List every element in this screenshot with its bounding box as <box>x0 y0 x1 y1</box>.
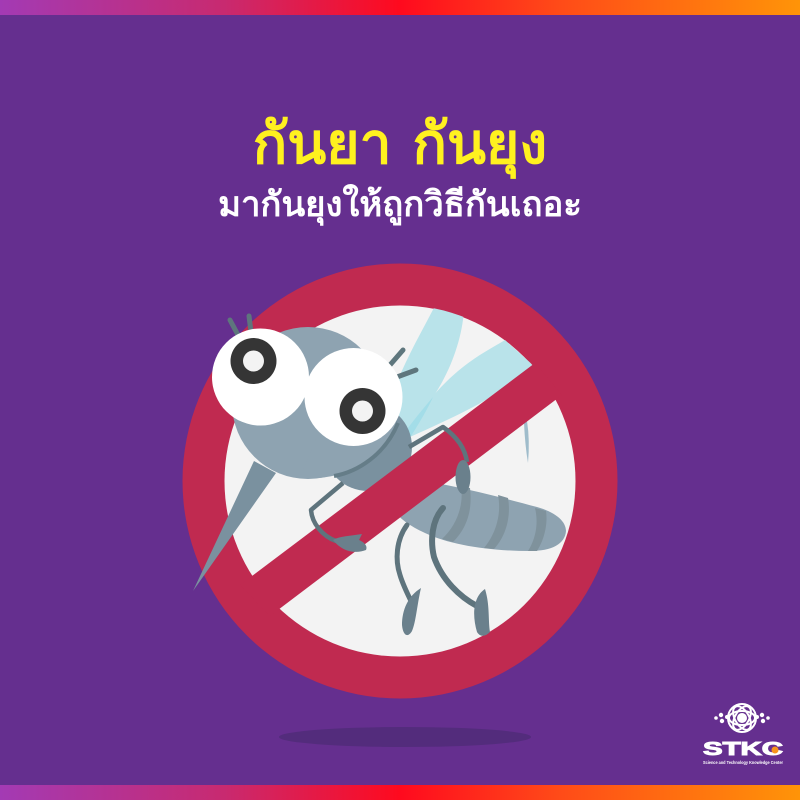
top gradient band <box>0 0 800 15</box>
mosquito wings <box>399 308 532 437</box>
prohibition sign bar <box>240 363 562 616</box>
mosquito hind feet <box>402 588 490 636</box>
logo orange dot <box>772 746 778 754</box>
logo tagline: Science and Technology Knowledge Center <box>703 760 783 765</box>
title: กันยา กันยุง <box>253 112 547 176</box>
wing sliver <box>524 421 529 463</box>
mosquito abdomen <box>395 480 566 551</box>
mosquito hind legs <box>397 508 477 606</box>
mosquito head <box>232 327 398 479</box>
logo wordmark: STKC <box>703 738 783 759</box>
ground shadow <box>279 727 531 747</box>
mosquito antennae <box>230 316 416 377</box>
mosquito left eye <box>212 328 309 426</box>
prohibition sign disc <box>182 264 618 698</box>
mosquito front leg right <box>409 427 470 494</box>
mosquito thorax <box>324 403 412 491</box>
mosquito right eye <box>304 348 402 446</box>
logo atom mark <box>728 703 756 733</box>
bottom gradient band <box>0 785 800 800</box>
logo side dots <box>714 713 770 723</box>
mosquito proboscis <box>193 461 276 591</box>
illustration: no-mosquito sign <box>182 264 618 747</box>
subtitle: มากันยุงให้ถูกวิธีกันเถอะ <box>218 186 582 224</box>
mosquito front leg left <box>311 483 367 552</box>
